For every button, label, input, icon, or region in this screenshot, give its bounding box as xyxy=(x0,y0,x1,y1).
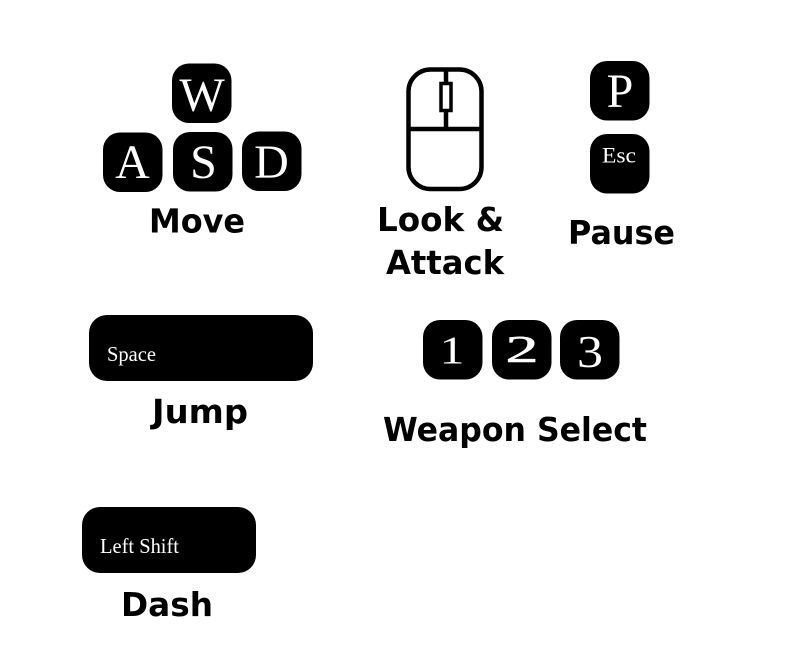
key P xyxy=(590,61,650,120)
key 1 xyxy=(423,320,482,380)
key S: S xyxy=(190,136,217,189)
key Left Shift xyxy=(82,507,256,573)
icon: mouse xyxy=(408,70,482,189)
key Space xyxy=(89,315,313,381)
label: Jump: Jump xyxy=(150,392,248,431)
WASD move control group xyxy=(103,64,302,240)
key Left Shift: Left Shift xyxy=(100,534,179,558)
key P: P xyxy=(607,65,633,118)
key D xyxy=(242,132,302,191)
label: Look & Attack: Attack xyxy=(386,243,505,282)
key Space: Space xyxy=(107,342,156,366)
key 3: 3 xyxy=(577,327,603,377)
label: Look & Attack xyxy=(377,200,505,282)
mouse look and attack group xyxy=(377,70,505,282)
key A: A xyxy=(115,136,150,189)
key S xyxy=(173,132,232,192)
key Esc xyxy=(590,134,650,194)
label: Look & Attack: Look & xyxy=(377,200,504,239)
key 2 xyxy=(492,320,552,380)
label: Move: Move xyxy=(149,202,245,240)
weapon select control group xyxy=(383,320,647,449)
key 1: 1 xyxy=(440,329,464,372)
dash control group xyxy=(82,507,256,624)
key 3 xyxy=(560,320,620,380)
label: Weapon Select: Weapon Select xyxy=(383,410,647,449)
key A xyxy=(103,132,162,192)
key Esc: Esc xyxy=(602,142,636,168)
key W: W xyxy=(179,69,225,122)
jump control group xyxy=(89,315,313,431)
key D: D xyxy=(254,136,289,189)
label: Pause: Pause xyxy=(568,213,675,252)
key W xyxy=(172,64,232,123)
label: Dash: Dash xyxy=(121,585,213,624)
pause control group xyxy=(568,61,675,252)
key 2: 2 xyxy=(506,329,538,371)
